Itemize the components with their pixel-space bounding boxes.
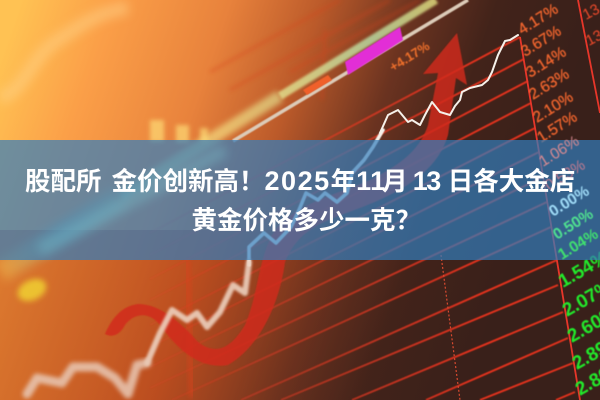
white strip: [233, 0, 468, 141]
title: [25, 166, 575, 235]
magenta block: [345, 27, 403, 75]
axis labels and teal glow seen through band: 0.00%: [546, 183, 593, 220]
title: 黄金价格多少一克？: [192, 207, 421, 235]
vertical dotted line: [441, 255, 460, 400]
blurred bars: [150, 120, 208, 143]
title: 股配所 金价创新高！2025年11月13 日各大金店: [25, 166, 575, 196]
yellow glow spot: [14, 275, 50, 305]
orange axis labels: 1.57%: [534, 109, 581, 146]
orange block: [303, 75, 332, 95]
blurred red lines top centre: [210, 0, 420, 100]
grid lines: [150, 37, 575, 400]
price line: [27, 35, 518, 394]
orange axis labels: 3.14%: [523, 44, 570, 81]
axis labels and teal glow seen through band: 0.50%: [550, 206, 597, 243]
orange axis labels: 2.10%: [530, 89, 577, 126]
orange axis labels: 3.67%: [518, 23, 565, 60]
translucent blue band: [0, 140, 600, 260]
green axis labels: [555, 247, 600, 400]
axis labels and teal glow seen through band: 1.06%: [536, 133, 583, 170]
coloured data strip: [0, 0, 436, 272]
blurred vertical red line: [187, 260, 192, 398]
orange axis labels: 2.63%: [526, 66, 573, 103]
axis lines: [520, 0, 600, 400]
blurred arrow label: +4.17%: [387, 38, 433, 75]
axis labels and teal glow seen through band: 0.53%: [542, 157, 589, 194]
orange axis labels: [515, 1, 581, 146]
faint pale curve top left: [0, 8, 128, 98]
red corner labels: [580, 0, 600, 50]
orange axis labels: 4.17%: [515, 1, 562, 38]
red arrow: [105, 33, 467, 366]
